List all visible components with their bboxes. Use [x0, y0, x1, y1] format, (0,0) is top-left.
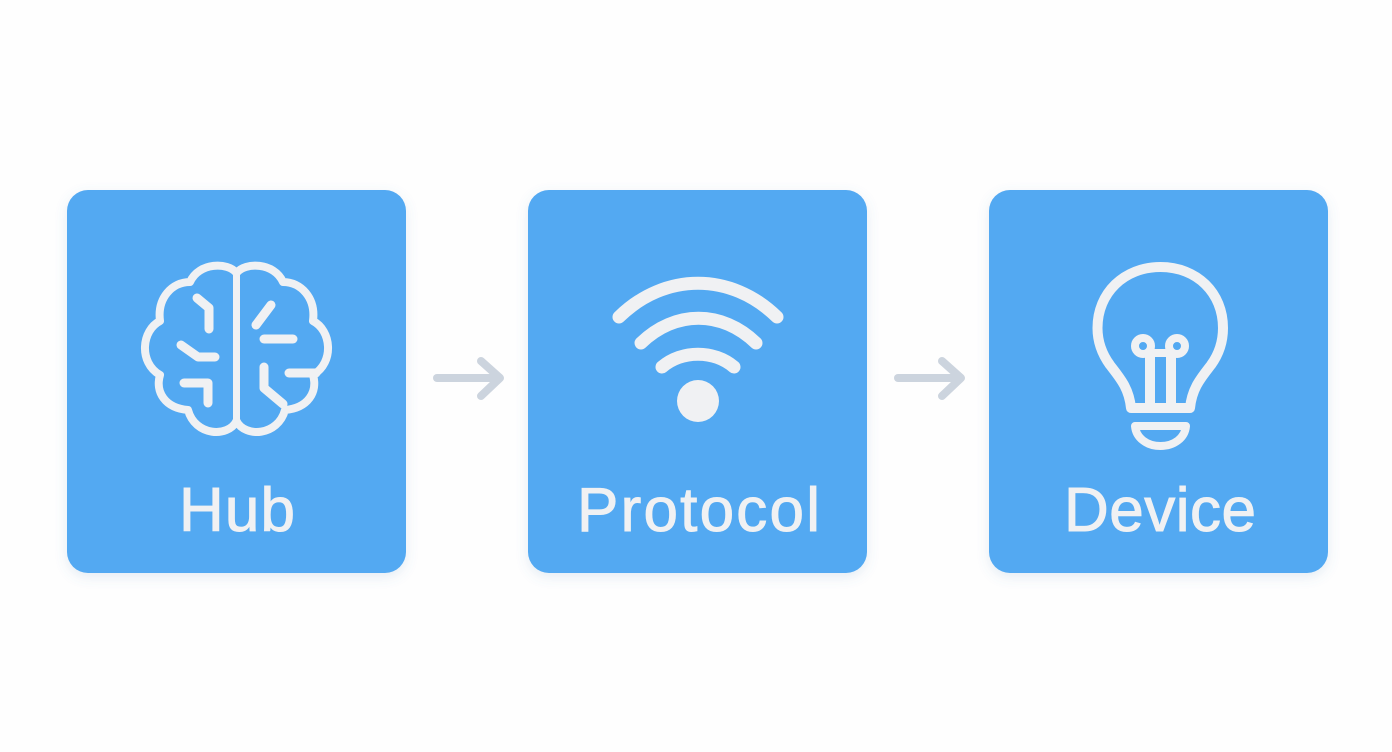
- label: Protocol: Protocol: [577, 476, 820, 545]
- arrow: hub to protocol: [437, 361, 500, 396]
- icon: brain: [145, 266, 328, 432]
- icon: light bulb: [1098, 267, 1223, 446]
- label: Hub: Hub: [179, 476, 295, 545]
- panel: protocol: [528, 190, 867, 573]
- label: Device: Device: [1064, 476, 1256, 545]
- icon: wifi: [619, 283, 777, 422]
- arrow: protocol to device: [898, 361, 961, 396]
- panel: hub: [67, 190, 406, 573]
- panel: device: [989, 190, 1328, 573]
